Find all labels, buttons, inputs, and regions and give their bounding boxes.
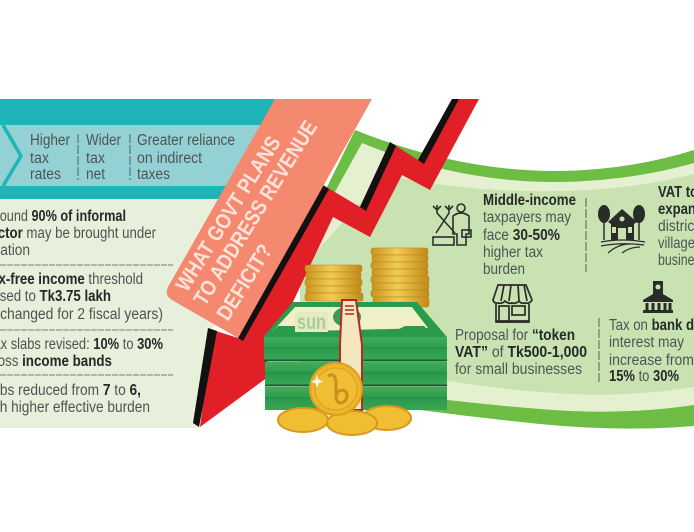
header text: revenue measures: tax xyxy=(30,150,49,167)
illustration: taka coins xyxy=(278,363,411,435)
text: token VAT: Proposal for “token xyxy=(455,327,575,344)
illustration: stack of banknotes xyxy=(263,300,447,410)
text: middle-income taxpayers: taxpayers may xyxy=(483,209,571,226)
text: bank deposit tax xyxy=(609,317,694,385)
icon: village house xyxy=(598,205,645,253)
light blue box xyxy=(0,125,270,186)
header text: revenue measures: taxes xyxy=(137,166,170,183)
text: middle-income taxpayers: Middle-income xyxy=(483,192,576,209)
text: middle-income taxpayers: face 30-50% xyxy=(483,227,560,244)
panel: left teal header band xyxy=(0,99,290,199)
icon: taxpayer with arrows xyxy=(433,204,471,245)
arrow: red falling arrow xyxy=(193,99,479,427)
text: token VAT: for small businesses xyxy=(455,361,582,378)
text: VAT expansion xyxy=(658,184,694,269)
header text: revenue measures xyxy=(30,132,235,183)
ribbon heading: DEFICIT? xyxy=(212,240,277,325)
header text: revenue measures: Greater reliance xyxy=(137,132,235,149)
text: middle-income taxpayers: burden xyxy=(483,261,525,278)
text: bank deposit tax: interest may xyxy=(609,334,684,351)
illustration: coin stacks xyxy=(305,248,429,307)
text: token VAT xyxy=(455,327,587,378)
icon: bank xyxy=(643,281,673,313)
header text: revenue measures: on indirect xyxy=(137,150,203,167)
money band xyxy=(340,300,362,410)
logo: sun watermark: sun xyxy=(297,311,326,334)
header text: revenue measures: tax xyxy=(86,150,105,167)
header text: revenue measures: Higher xyxy=(30,132,70,149)
logo: sun watermark xyxy=(295,307,361,334)
text: left column measures xyxy=(0,208,173,416)
header text: revenue measures: Wider xyxy=(86,132,121,149)
ribbon heading: TO ADDRESS REVENUE xyxy=(189,116,322,310)
panel: right green curved panel xyxy=(300,130,694,429)
panel: salmon diagonal ribbon xyxy=(167,99,372,338)
text: token VAT: VAT” of Tk500-1,000 xyxy=(455,344,587,361)
chevron xyxy=(3,125,21,186)
header text: revenue measures: rates xyxy=(30,166,61,183)
text: bank deposit tax: 15% to 30% xyxy=(609,368,679,385)
header text: revenue measures: net xyxy=(86,166,106,183)
text: middle-income taxpayers: higher tax xyxy=(483,244,543,261)
panel: left light green panel xyxy=(0,99,290,428)
text: middle-income taxpayers xyxy=(483,192,576,278)
icon: shop xyxy=(493,285,532,322)
ribbon heading: WHAT GOVT PLANS xyxy=(171,132,286,296)
